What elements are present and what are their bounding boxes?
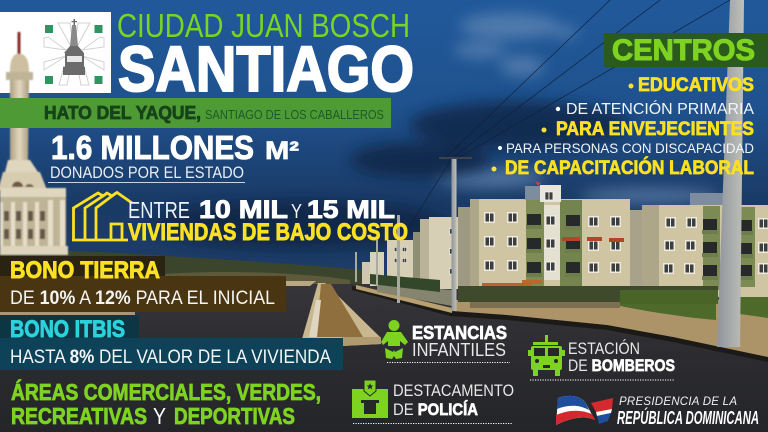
panel: bono itbis xyxy=(0,315,343,370)
label: destacamento de policia xyxy=(353,381,514,424)
location bar: HATO DEL YAQUE, xyxy=(44,102,201,123)
label: estancias infantiles: ESTANCIAS xyxy=(412,323,507,343)
apartment block one xyxy=(458,181,630,298)
icon: houses xyxy=(72,192,132,240)
commercial areas text: DEPORTIVAS xyxy=(174,403,295,429)
label: estancias infantiles: INFANTILES xyxy=(412,340,506,360)
title: Ciudad Juan Bosch: CIUDAD JUAN BOSCH xyxy=(117,7,410,44)
label: estacion de bomberos xyxy=(530,339,675,380)
panel: bono tierra xyxy=(0,256,286,312)
commercial areas text: ÁREAS COMERCIALES, VERDES, xyxy=(11,378,321,405)
commercial areas text: RECREATIVAS xyxy=(11,403,147,429)
icon: dominican flag xyxy=(556,396,613,425)
utility pole: small xyxy=(355,215,400,303)
housing stat: ENTRE xyxy=(128,197,190,223)
panel: centros: DE ATENCIÓN PRIMARIA xyxy=(566,101,755,118)
label: estancias infantiles xyxy=(387,323,510,362)
utility pole: right xyxy=(717,0,744,347)
utility pole: centre xyxy=(439,157,472,311)
label: estacion de bomberos: ESTACIÓN xyxy=(568,339,640,358)
sidewalk and dirt lot xyxy=(352,285,768,362)
panel: bono itbis: BONO ITBIS xyxy=(10,316,125,343)
icon: fire truck xyxy=(528,335,565,376)
icon: police station xyxy=(352,380,388,418)
panel: centros: PARA PERSONAS CON DISCAPACIDAD xyxy=(506,141,754,156)
fence and shrubs xyxy=(458,283,718,304)
title: Santiago: SANTIAGO xyxy=(118,33,414,105)
land area stat: M² xyxy=(265,137,299,165)
land area stat: DONADOS POR EL ESTADO xyxy=(50,164,244,182)
background photo: sky xyxy=(0,0,768,300)
label: estacion de bomberos: DE BOMBEROS xyxy=(568,356,675,375)
panel: centros: PARA ENVEJECIENTES xyxy=(556,119,754,140)
commercial areas text: Y xyxy=(153,403,166,429)
apartment block two xyxy=(630,193,768,298)
logo text: presidencia xyxy=(617,396,759,428)
background photo: far vegetation and ground xyxy=(0,251,768,432)
logo panel xyxy=(0,12,111,93)
housing stat: Y xyxy=(291,201,302,223)
housing stat: 10 MIL xyxy=(199,196,288,224)
logo text: presidencia: PRESIDENCIA DE LA xyxy=(619,396,737,408)
housing stat xyxy=(128,196,408,246)
monument xyxy=(0,32,68,255)
icon: baby xyxy=(381,320,408,359)
location bar: SANTIAGO DE LOS CABALLEROS xyxy=(205,108,384,122)
panel: centros xyxy=(492,33,768,179)
road median xyxy=(300,283,381,346)
panel: centros: CENTROS xyxy=(612,34,755,67)
housing stat: 15 MIL xyxy=(307,196,395,224)
panel: bono itbis: HASTA 8% DEL VALOR DE LA VIVIENDA xyxy=(10,347,331,368)
label: destacamento de policia: DE POLICÍA xyxy=(393,400,478,419)
panel: bono tierra: DE 10% A 12% PARA EL INICIAL xyxy=(10,288,275,309)
far apartment blocks xyxy=(362,217,458,306)
land area stat xyxy=(48,129,299,183)
land area stat: 1.6 MILLONES xyxy=(51,129,254,166)
label: destacamento de policia: DESTACAMENTO xyxy=(393,381,514,400)
panel: centros: EDUCATIVOS xyxy=(638,75,754,96)
housing stat: VIVIENDAS DE BAJO COSTO xyxy=(128,219,408,246)
panel: bono tierra: BONO TIERRA xyxy=(10,257,160,284)
commercial areas text xyxy=(11,378,321,429)
power lines xyxy=(395,0,730,250)
location bar xyxy=(0,98,391,128)
